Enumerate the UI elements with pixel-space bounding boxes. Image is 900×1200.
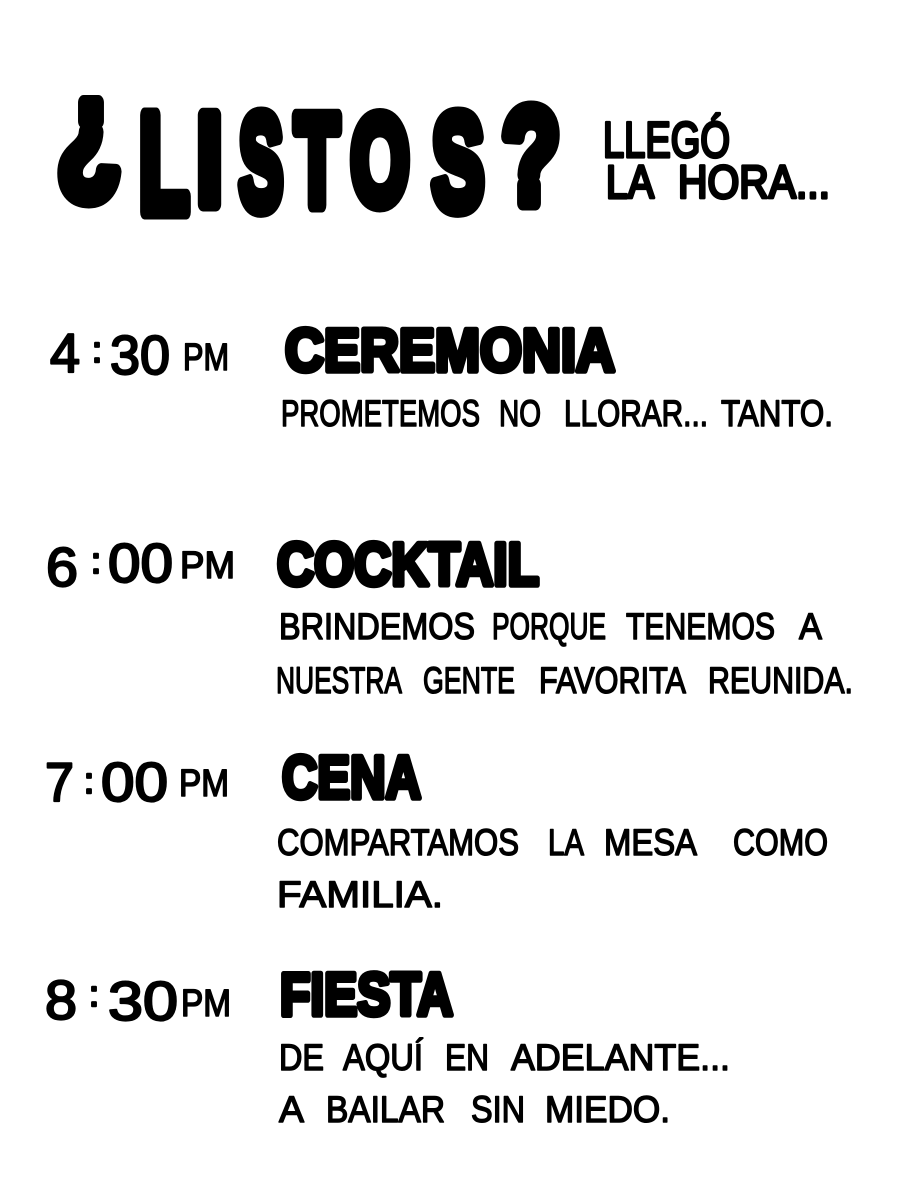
title: ¿Listos?: ¿ (57, 49, 121, 207)
description: cocktail: TENEMOS (626, 606, 775, 647)
title: ¿Listos?: L (139, 84, 189, 242)
subtitle: llegó la hora: HORA... (678, 156, 830, 208)
description: cena: COMO (733, 822, 828, 863)
title: ¿Listos?: O (351, 90, 409, 231)
description: fiesta: BAILAR (326, 1089, 445, 1130)
title: ¿Listos?: ? (502, 80, 560, 232)
time: 4:30 pm: 4 (50, 322, 80, 384)
panel: fiesta (45, 961, 730, 1130)
description: ceremonia (281, 393, 833, 434)
description: cocktail: BRINDEMOS (279, 606, 475, 647)
description: cena: MESA (604, 822, 697, 863)
time: 7:00 pm: 7 (45, 751, 74, 813)
panel: ceremonia (50, 317, 833, 434)
description: ceremonia: TANTO. (721, 393, 833, 434)
panel: cena (45, 744, 828, 915)
description: cocktail: PORQUE (492, 606, 606, 647)
title: ¿Listos?: S (432, 86, 484, 238)
time: 6:00 pm (46, 532, 235, 598)
subtitle: llegó la hora: LA (606, 156, 654, 208)
description: fiesta: MIEDO. (545, 1089, 670, 1130)
time: 7:00 pm: PM (179, 763, 229, 805)
title: ¿Listos? (57, 49, 560, 242)
description: cena: COMPARTAMOS (277, 822, 519, 863)
description: cocktail: FAVORITA (539, 660, 686, 701)
heading: cena: CENA (282, 744, 421, 811)
time: 8:30 pm: 30 (108, 970, 178, 1032)
time: 7:00 pm: 00 (101, 751, 168, 813)
time: 4:30 pm: PM (183, 337, 229, 379)
description: cena: LA (548, 822, 584, 863)
time: 7:00 pm (45, 751, 229, 813)
time: 6:00 pm: PM (180, 545, 235, 587)
panel: cocktail (46, 531, 853, 701)
description: fiesta: EN (445, 1037, 489, 1078)
title: ¿Listos?: I (197, 88, 222, 232)
description: ceremonia: LLORAR... (564, 393, 708, 434)
description: ceremonia: PROMETEMOS (281, 393, 480, 434)
time: 4:30 pm (50, 322, 229, 386)
title: ¿Listos?: T (295, 89, 339, 233)
description: fiesta: AQUÍ (343, 1037, 424, 1078)
time: 4:30 pm: : (92, 329, 102, 370)
time: 8:30 pm (45, 969, 231, 1032)
time: 7:00 pm: : (84, 760, 94, 801)
time: 8:30 pm: : (89, 973, 99, 1014)
description: cocktail: GENTE (423, 660, 515, 701)
description: ceremonia: NO (499, 393, 541, 434)
time: 6:00 pm: 6 (46, 536, 78, 598)
heading: fiesta: FIESTA (280, 961, 453, 1028)
time: 8:30 pm: PM (181, 983, 231, 1025)
subtitle: llegó la hora (603, 112, 830, 208)
description: fiesta: DE (279, 1037, 324, 1078)
description: cena (277, 822, 828, 915)
description: cocktail: A (799, 606, 822, 647)
description: fiesta (279, 1037, 730, 1130)
description: cocktail: REUNIDA. (708, 660, 853, 701)
subtitle: llegó la hora: LLEGÓ (603, 112, 730, 168)
description: fiesta: A (279, 1089, 304, 1130)
description: fiesta: ADELANTE... (511, 1037, 730, 1078)
time: 8:30 pm: 8 (45, 969, 77, 1031)
description: cocktail: NUESTRA (276, 660, 402, 701)
description: cena: FAMILIA. (277, 874, 443, 915)
title: ¿Listos?: S (239, 86, 283, 238)
heading: ceremonia: CEREMONIA (285, 317, 615, 384)
time: 6:00 pm: : (91, 540, 101, 581)
description: fiesta: SIN (471, 1089, 525, 1130)
description: cocktail (276, 606, 853, 701)
heading: cocktail: COCKTAIL (277, 531, 539, 598)
time: 4:30 pm: 30 (110, 324, 170, 386)
time: 6:00 pm: 00 (108, 532, 173, 594)
